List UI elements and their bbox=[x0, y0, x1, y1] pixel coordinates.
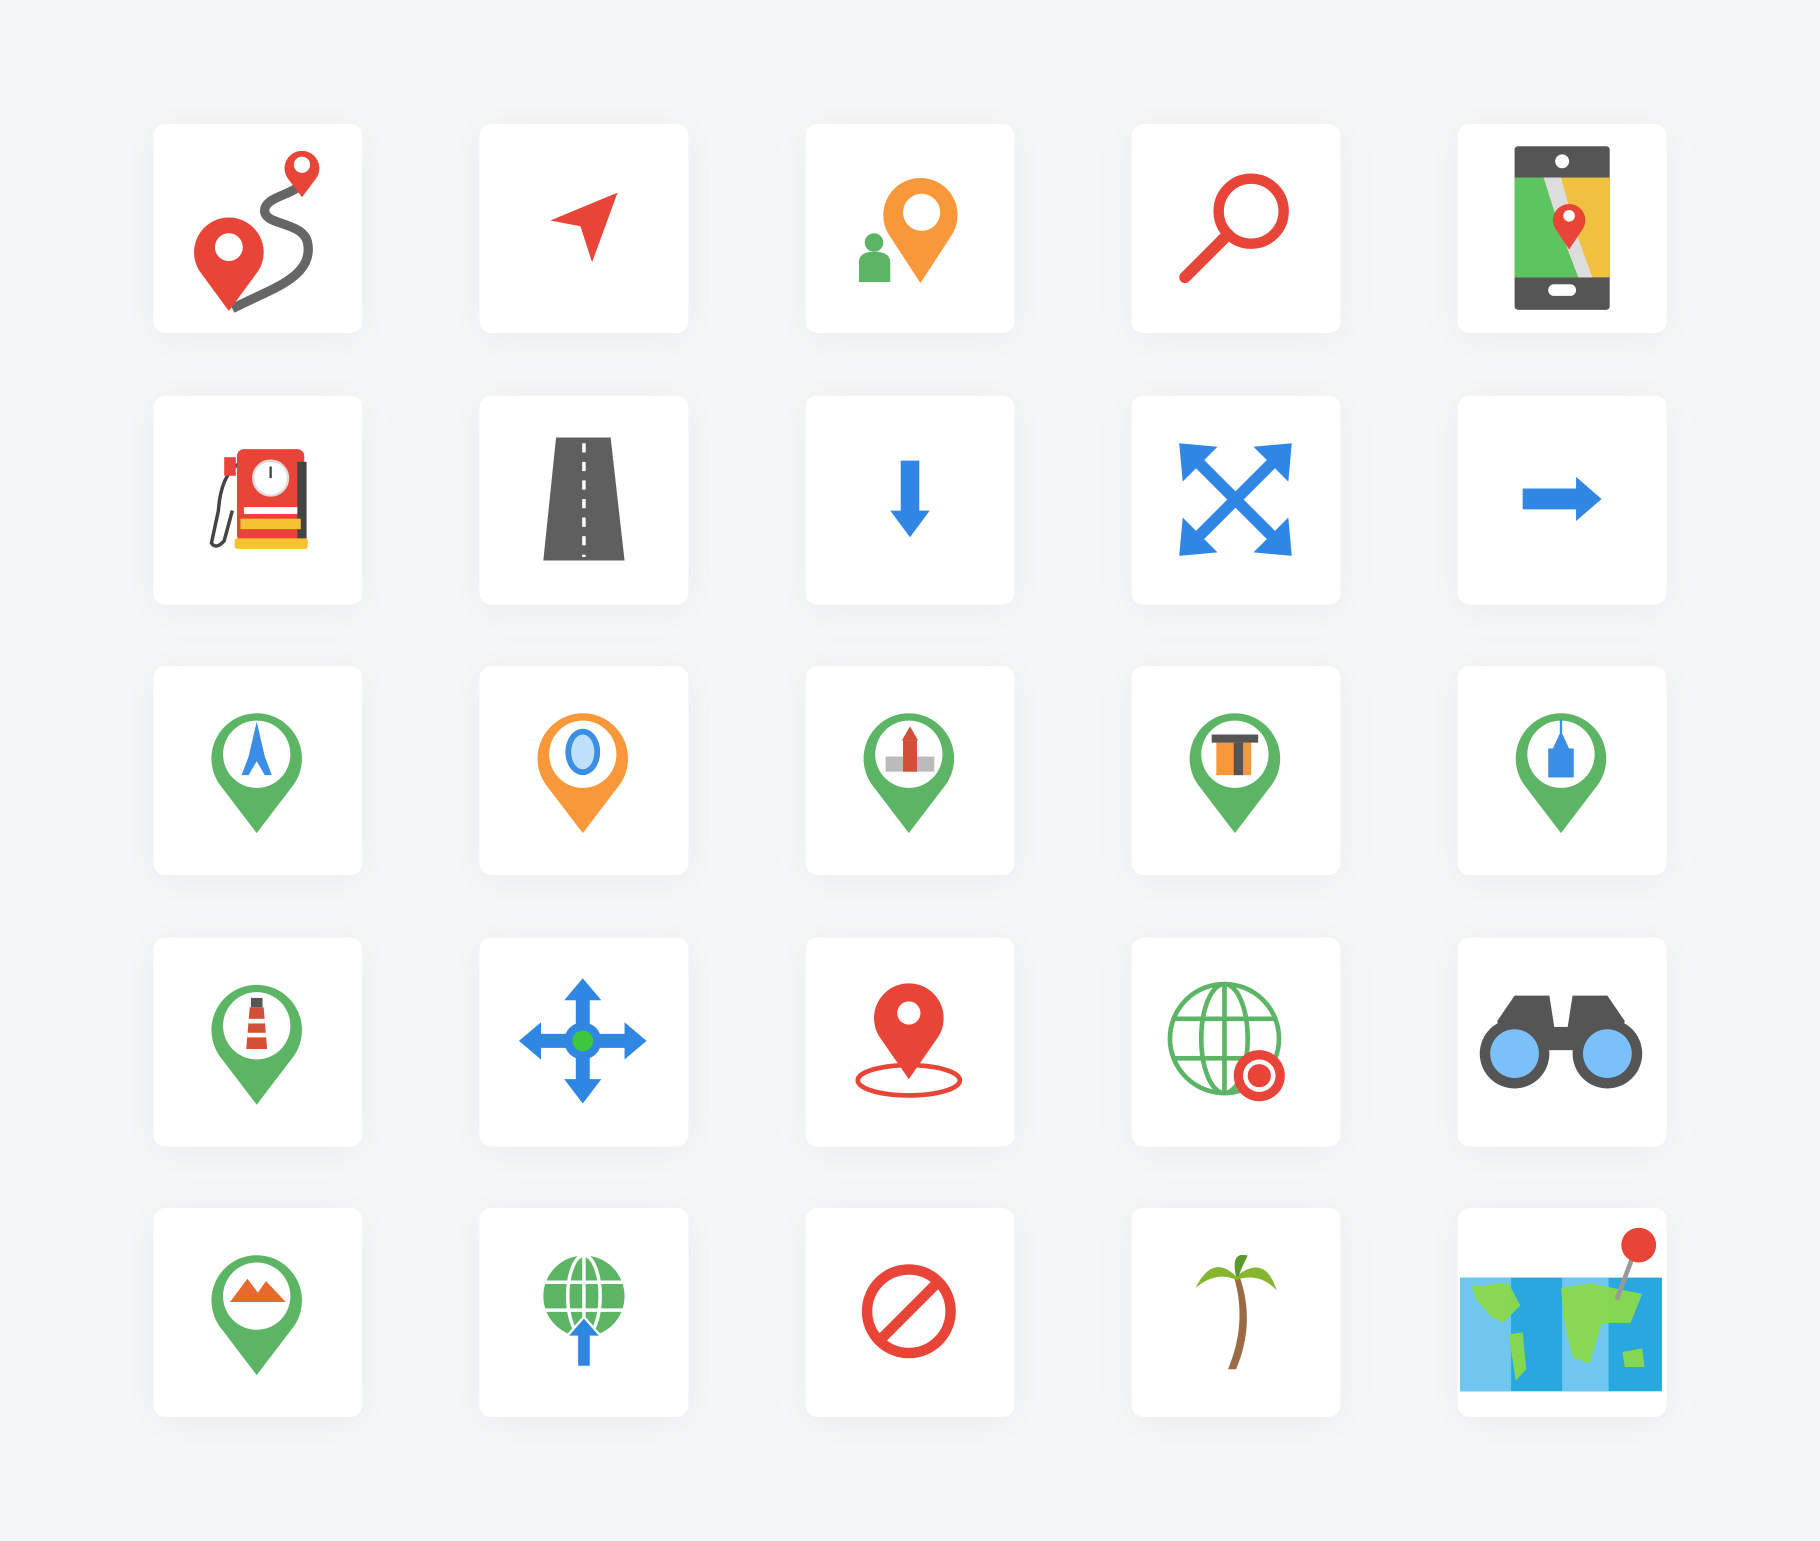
icon: navigation arrow bbox=[550, 193, 618, 262]
icon: globe upload bbox=[543, 1256, 625, 1367]
icon: church pin bbox=[1516, 713, 1606, 833]
icon: road bbox=[543, 437, 625, 560]
icon: person location bbox=[859, 178, 958, 283]
icon: stadium pin bbox=[538, 713, 628, 833]
icon: store pin bbox=[1190, 713, 1280, 833]
icon: binoculars bbox=[1480, 996, 1642, 1088]
icon: fuel pump bbox=[211, 449, 308, 549]
icon: magnifier bbox=[1185, 179, 1284, 277]
icon: location point bbox=[858, 983, 960, 1095]
icon: route bbox=[194, 151, 319, 311]
icon: globe refresh bbox=[1170, 984, 1285, 1101]
icon: move arrows bbox=[519, 978, 647, 1104]
icon: eiffel pin bbox=[211, 713, 302, 833]
icon: mountain pin bbox=[211, 1255, 302, 1375]
icon: world map bbox=[1460, 1228, 1662, 1391]
icon: lighthouse pin bbox=[211, 985, 302, 1105]
icon: castle pin bbox=[864, 713, 954, 833]
icon: palm tree bbox=[1195, 1255, 1277, 1369]
icon: phone map bbox=[1515, 146, 1610, 310]
icon: arrow down bbox=[890, 461, 930, 537]
icon: prohibited bbox=[867, 1269, 951, 1353]
icon: arrow right bbox=[1523, 477, 1602, 521]
icon: expand arrows bbox=[1179, 443, 1292, 556]
